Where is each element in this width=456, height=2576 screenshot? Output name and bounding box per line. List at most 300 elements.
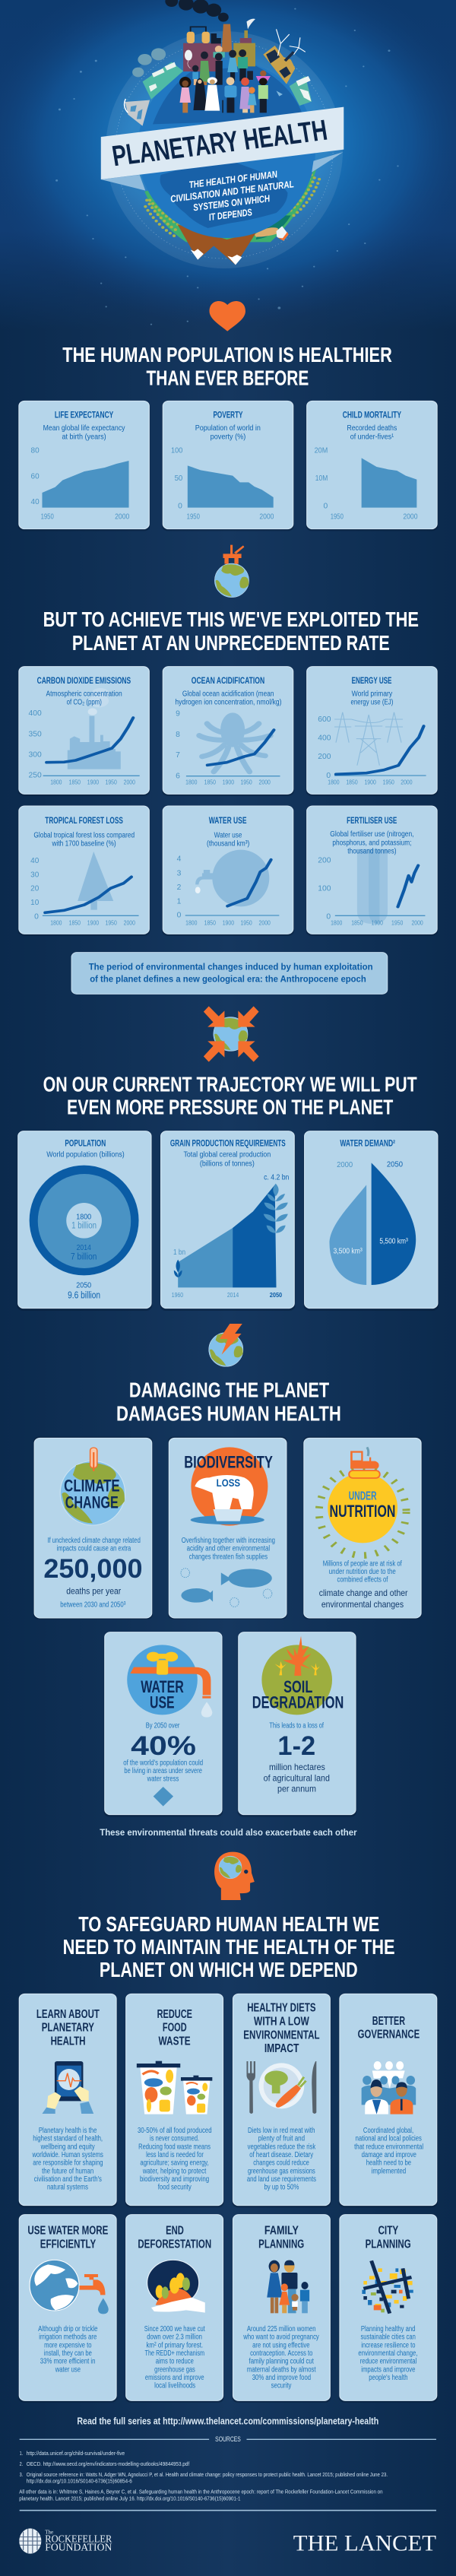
panel: healthy diets: by up to 50% [264,2183,299,2191]
panel: population: 1800 [76,1213,91,1221]
panel: soil degradation: This leads to a loss of [269,1721,324,1730]
planet [138,60,315,238]
panel: ocean acidification: 1800 [185,779,198,786]
panel: learn about planetary health: civilisation and the Earth's [34,2175,102,2184]
panel: population: 7 billion [71,1252,97,1261]
banner folds [101,152,344,191]
panel: water use [104,1632,223,1817]
panel: child mortality: of under-fives¹ [350,433,394,441]
panel: tropical forest loss: Global tropical forest loss compared [33,831,135,839]
panel: biodiversity loss: acidity and other environmental [187,1544,270,1553]
callout: Anthropocene [71,953,388,994]
panel: under nutrition: under nutrition due to the [329,1568,396,1576]
panel: better governance: that reduce environmental [354,2143,423,2151]
logo: The Lancet: THE LANCET [293,2530,436,2555]
panel: grain production: Total global cereal production [183,1150,271,1159]
panel: family planning: contraception. Access to [250,2349,312,2358]
icon: arrows pressing on earth [204,1006,259,1062]
panel: ocean acidification: 9 [176,709,180,718]
purple factory [183,27,221,71]
panel: child mortality: 20M [315,446,328,455]
panel: fertiliser use: 200 [318,856,331,864]
logo: Rockefeller Foundation: FOUNDATION [45,2542,112,2553]
panel: ocean acidification: 1900 [223,779,234,786]
panel: life expectancy [18,401,150,531]
tilted tan building and windmills [263,29,306,84]
panel: fertiliser use: 1900 [372,919,383,927]
panel: energy use: 0 [326,772,331,780]
panel: fertiliser use: 1850 [351,919,363,927]
sources heading: SOURCES [215,2436,241,2444]
subtitle: THE HEALTH OF HUMAN [188,169,279,190]
panel: tropical forest loss: 1850 [69,919,81,927]
logo: Rockefeller Foundation: The [45,2529,53,2536]
panel: learn about planetary health: are responsible for shaping [33,2159,103,2167]
panel: climate change: between 2030 and 2050³ [60,1600,126,1609]
panel: reduce food waste: FOOD [163,2022,187,2034]
panel: ocean acidification: 7 [176,751,180,760]
panel: family planning: Around 225 million women [247,2325,316,2333]
panel: end deforestation: The REDD+ mechanism [145,2349,204,2358]
panel: water use chart: 1950 [240,919,252,927]
hero illustration: planet with people and industry [106,0,343,268]
panel: city planning: environmental change, [358,2349,417,2358]
panel: use water efficiently: more expensive to [44,2341,92,2349]
panel: water demand: 2000 [337,1161,353,1169]
panel: energy use: 2000 [401,779,413,786]
panel: carbon dioxide: 1850 [69,779,81,786]
panel: family planning: security [271,2381,292,2390]
icon: earth with lightning [209,1324,243,1366]
panel: end deforestation: local livelihoods [154,2381,195,2390]
panel: tropical forest loss: TROPICAL FOREST LOSS [45,815,123,826]
panel: city planning: Planning healthy and [361,2325,415,2333]
panel: water use chart: 1850 [204,919,216,927]
panel: fertiliser use: 100 [318,884,331,893]
panel: water use chart: 1800 [185,919,198,927]
panel: energy use: 200 [318,753,331,761]
panel: learn about planetary health: PLANETARY [42,2022,94,2034]
panel: energy use: 600 [318,715,331,724]
panel: under nutrition: Millions of people are at risk of [323,1559,402,1568]
panel: water use chart [162,806,294,936]
panel: water use chart: WATER USE [209,815,247,826]
panel: carbon dioxide: Atmospheric concentration [46,690,122,698]
banner with title [101,107,344,191]
panel: better governance: damage and improve [362,2151,416,2159]
panel: water use: of the world's population could [123,1759,203,1767]
panel: use water efficiently: EFFICIENTLY [40,2238,96,2251]
small house [277,226,289,241]
banner ribbon [101,107,344,179]
panel: population [17,1131,152,1311]
panel: learn about planetary health: worldwide. Human systems [32,2151,103,2159]
panel: tropical forest loss: 0 [34,912,39,921]
panel: climate change: 250,000 [43,1553,143,1584]
panel: soil degradation [238,1632,356,1817]
panel: carbon dioxide: 2000 [124,779,135,786]
panel: ocean acidification: 1850 [204,779,216,786]
panel: water demand: 2050 [387,1160,403,1169]
panel: tropical forest loss: 10 [30,899,39,907]
panel: city planning: increase resilience to [361,2341,415,2349]
land ring [144,162,316,242]
panel: ocean acidification: 1950 [240,779,252,786]
panel: better governance: BETTER [372,2015,405,2028]
panel: climate change: CHANGE [65,1494,119,1512]
panel: learn about planetary health: Planetary health is the [39,2127,97,2135]
logo: Rockefeller Foundation [19,2528,112,2554]
icon: head with earth [214,1852,255,1900]
chimney [222,24,232,52]
panel: tropical forest loss: 1950 [106,919,117,927]
sources list [19,2450,388,2501]
panel: energy use: 400 [318,734,331,742]
panel: under nutrition [303,1436,422,1620]
panel: carbon dioxide: 1950 [106,779,117,786]
section: exploited planet [18,632,438,936]
heading [116,1379,341,1426]
sources list: 1. [20,2450,23,2457]
panel: tropical forest loss: 1900 [87,919,99,927]
panel: biodiversity loss: changes threaten fish supplies [189,1553,268,1561]
panel: child mortality [306,401,438,531]
heading [63,1913,395,1982]
panel: water use: be living in areas under severe [124,1767,202,1775]
panel: healthy diets [232,1994,331,2207]
panel: tropical forest loss: 40 [30,857,39,865]
panel: water use chart: 1900 [223,919,234,927]
panel: soil degradation: 1-2 [277,1731,315,1761]
panel: learn about planetary health [18,1994,117,2207]
panel: end deforestation: aims to reduce [156,2357,194,2365]
panel: soil degradation: per annum [277,1784,316,1794]
panel: water use chart: 0 [177,911,181,919]
panel: water use: WATER [141,1678,184,1697]
panel: grain production: c. 4.2 bn [264,1173,289,1182]
panel: population: 9.6 billion [68,1290,100,1300]
panel: population: 1 billion [71,1220,97,1230]
panel: ocean acidification: Global ocean acidification (mean [182,690,274,698]
panel: population: World population (billions) [46,1150,125,1159]
panel: child mortality: 1950 [331,512,344,521]
panel: carbon dioxide: 1800 [50,779,62,786]
panel: reduce food waste: biodiversity and improving [140,2175,209,2184]
panel: grain production: 2014 [227,1292,239,1299]
panel: end deforestation: Since 2000 we have cut [144,2325,205,2333]
panel: family planning: 30% and improve food [252,2374,311,2382]
icon: heart [210,301,245,332]
panel: poverty: 50 [175,474,182,483]
panel: healthy diets: vegetables reduce the risk [248,2143,315,2151]
panel: energy use [306,667,438,796]
panel: learn about planetary health: HEALTH [51,2035,85,2048]
balloon [185,50,192,68]
panel: family planning: maternal deaths by almost [247,2365,316,2374]
panel: use water efficiently: Although drip or trickle [38,2325,98,2333]
panel: use water efficiently [18,2215,117,2403]
callout: Anthropocene: The period of environmental changes induced by human exploitation [89,962,373,972]
panel: child mortality: Recorded deaths [347,424,397,433]
panel: poverty: poverty (%) [211,433,246,441]
panel: water use chart: 2 [177,884,181,892]
panel: tropical forest loss: 20 [30,884,39,893]
panel: carbon dioxide [18,667,150,796]
panel: energy use: World primary [352,690,393,698]
panel: child mortality: 0 [324,502,328,510]
heading: THAN EVER BEFORE [146,367,309,390]
panel: carbon dioxide: 400 [29,709,42,718]
panel: tropical forest loss [18,806,150,936]
panel: reduce food waste: water, helping to protect [142,2167,206,2175]
panel: reduce food waste: agriculture; saving energy, [140,2159,209,2167]
heading [43,1074,417,1119]
heading [62,344,392,390]
icon: oil rig on earth [214,545,249,598]
panel: biodiversity loss [168,1436,287,1620]
panel: better governance: health need to be [366,2159,411,2167]
panel: water use chart: 2000 [259,919,271,927]
panel: family planning [232,2215,331,2403]
panel: population: POPULATION [65,1138,106,1148]
panel: fertiliser use: thousand tonnes) [347,847,397,855]
panel: under nutrition: combined effects of [337,1575,388,1584]
panel: better governance [339,1994,438,2207]
panel: ocean acidification: OCEAN ACIDIFICATION [192,675,264,686]
panel: poverty [162,401,294,531]
panel: energy use: 1800 [328,779,340,786]
panel: water use: USE [150,1694,175,1712]
sources list: http://data.unicef.org/child-survival/under-five [27,2450,125,2457]
text: threats exacerbate: These environmental threats could also exacerbate each other [100,1827,357,1838]
sources list: OECD. http://www.oecd.org/env/indicators-modelling-outlooks/49844953.pdf [27,2460,190,2467]
sources list: 2. [20,2460,23,2467]
panel: ocean acidification [162,667,294,796]
teal and tan land [255,215,291,240]
panel: water use chart: 4 [177,855,181,863]
panel: life expectancy: Mean global life expectancy [43,424,125,433]
panel: reduce food waste: is never consumed. [150,2134,199,2143]
panel: poverty: POVERTY [213,409,243,420]
section: actions second row [18,2215,438,2555]
panel: end deforestation [125,2215,224,2403]
panel: carbon dioxide: 300 [29,750,42,759]
panel: water demand: WATER DEMAND² [340,1138,395,1148]
sources list: 3. [20,2471,23,2478]
panel: energy use: 1950 [383,779,394,786]
subtitle: IT DEPENDS [208,207,253,223]
panel: grain production [160,1131,295,1311]
panel: end deforestation: DEFORESTATION [138,2238,211,2251]
panel: use water efficiently: water use [55,2365,81,2374]
heading: DAMAGES HUMAN HEALTH [116,1402,341,1426]
panel: water demand: 5,500 km³ [379,1237,408,1245]
panel: city planning: people's health [369,2374,407,2382]
mountains [177,224,257,265]
panel: life expectancy: 60 [31,472,40,481]
panel: healthy diets: HEALTHY DIETS [247,2002,316,2014]
panel: tropical forest loss: 30 [30,871,39,879]
panel: life expectancy: at birth (years) [62,433,106,441]
panel: carbon dioxide: 250 [29,771,42,779]
panel: water use chart: 3 [177,869,181,877]
panel: poverty: 2000 [259,512,274,521]
panel: life expectancy: 40 [31,498,40,506]
panel: biodiversity loss: LOSS [217,1477,240,1489]
panel: biodiversity loss: Overfishing together with increasing [182,1537,275,1545]
panel: under nutrition: climate change and other [319,1588,408,1598]
panel: city planning: CITY [378,2224,398,2237]
panel: climate change: deaths per year [66,1586,122,1596]
panel: city planning: PLANNING [366,2238,411,2251]
logo: Rockefeller Foundation: ROCKEFELLER [45,2533,112,2545]
panel: learn about planetary health: the future of human [42,2167,93,2175]
panel: biodiversity loss: BIODIVERSITY [184,1454,273,1472]
panel: soil degradation: DEGRADATION [252,1694,344,1712]
panel: family planning: are not using effective [252,2341,310,2349]
panel: water demand: 3,500 km³ [334,1247,363,1255]
left factories [125,62,183,126]
panel: grain production: 2050 [270,1292,282,1299]
panel: use water efficiently: USE WATER MORE [27,2224,108,2237]
panel: family planning: who want to avoid pregnancy [243,2333,319,2341]
section: threats second row [100,1632,357,1900]
panel: reduce food waste: REDUCE [157,2008,192,2021]
panel: carbon dioxide: CARBON DIOXIDE EMISSIONS [37,675,131,686]
panel: carbon dioxide: 350 [29,730,42,738]
callout: Anthropocene: of the planet defines a new geological era: the Anthropocene epoch [90,974,366,984]
panel: water use: 40% [131,1731,196,1761]
panel: better governance: Coordinated global, [363,2127,413,2135]
panel: reduce food waste: 30-50% of all food produced [138,2127,212,2135]
section: damage to health [33,1324,422,1620]
panel: end deforestation: km² of primary forest. [146,2341,203,2349]
title: PLANETARY HEALTH [109,113,330,173]
panel: end deforestation: emissions and improve [145,2374,204,2382]
panel: poverty: 100 [171,446,182,455]
panel: ocean acidification: 2000 [259,779,271,786]
panel: child mortality: 2000 [403,512,418,521]
panel: fertiliser use: FERTILISER USE [347,815,397,826]
sources list: http://dx.doi.org/10.1016/S0140-6736(15)60854-6 [27,2478,132,2485]
panel: reduce food waste: WASTE [159,2035,191,2048]
panel: reduce food waste: less land is needed for [146,2151,204,2159]
panel: child mortality: 10M [315,474,328,483]
panel: poverty: Population of world in [195,424,261,433]
panel: carbon dioxide: of CO₂ (ppm) [67,698,102,706]
panel: water demand [303,1131,439,1311]
panel: tropical forest loss: 1800 [50,919,62,927]
heading: DAMAGING THE PLANET [129,1379,329,1402]
panel: family planning: PLANNING [258,2238,304,2251]
teal building right [290,76,312,106]
panel: climate change [33,1436,153,1620]
panel: energy use: 1900 [364,779,376,786]
panel: fertiliser use: 1950 [391,919,404,927]
panel: water use chart: 1 [177,897,181,906]
section: pressure on the planet [17,953,439,1311]
panel: healthy diets: WITH A LOW [254,2016,309,2028]
panel: energy use: energy use (EJ) [350,698,394,706]
panel: child mortality: CHILD MORTALITY [343,409,401,420]
panel: learn about planetary health: LEARN ABOUT [36,2008,100,2021]
panel: fertiliser use: 0 [326,912,331,921]
panel: soil degradation: of agricultural land [264,1772,330,1783]
panel: reduce food waste [125,1994,224,2207]
panel: healthy diets: plenty of fruit and [258,2134,305,2143]
panel: ocean acidification: hydrogen ion concentration, nmol/kg) [175,698,282,706]
subtitle: CIVILISATION AND THE NATURAL [169,179,295,205]
panel: population: 2050 [76,1281,91,1290]
panel: use water efficiently: irrigation methods are [39,2333,97,2341]
panel: end deforestation: down over 2.3 million [147,2333,202,2341]
panel: poverty: 0 [178,502,182,510]
panel: city planning: sustainable cities can [360,2333,416,2341]
panel: family planning: family planning could cut [249,2357,314,2365]
panel: healthy diets: IMPACT [264,2042,299,2055]
panel: end deforestation: greenhouse gas [154,2365,195,2374]
panel: learn about planetary health: highest standard of health, [33,2134,103,2143]
panel: fertiliser use: Global fertiliser use (nitrogen, [330,830,414,839]
panel: ocean acidification: 6 [176,772,180,780]
panel: water use chart: (thousand km³) [207,839,250,848]
panel: healthy diets: changes could reduce [253,2159,309,2167]
panel: population: 2014 [77,1244,91,1252]
panel: grain production: GRAIN PRODUCTION REQUIREMENTS [170,1138,286,1148]
panel: tropical forest loss: 2000 [124,919,135,927]
panel: life expectancy: LIFE EXPECTANCY [55,409,113,420]
globe halo ring [106,31,343,268]
panel: use water efficiently: 33% more efficient in [40,2357,96,2365]
panel: city planning: reduce environmental [360,2357,416,2365]
panel: better governance: GOVERNANCE [358,2028,420,2041]
panel: fertiliser use: phosphorus, and potassium; [332,839,411,847]
panel: better governance: national and local policies [356,2134,422,2143]
panel: reduce food waste: food security [158,2183,192,2191]
panel: grain production: (billions of tonnes) [200,1160,255,1168]
panel: poverty: 1950 [187,512,200,521]
panel: climate change: If unchecked climate change related [47,1537,141,1545]
panel: city planning: impacts and improve [361,2365,415,2374]
panel: energy use: 1850 [346,779,358,786]
panel: fertiliser use [306,806,438,936]
panel: use water efficiently: install, they can be [44,2349,92,2358]
people [179,46,271,113]
subtitle [169,169,295,223]
panel: under nutrition: environmental changes [321,1599,404,1610]
panel: water use chart: Water use [214,831,242,839]
panel: climate change: impacts could cause an extra [57,1544,131,1553]
panel: grain production: 1960 [172,1292,183,1299]
panel: ocean acidification: 8 [176,731,180,739]
smoke from chimney [165,0,229,22]
panel: healthy diets: greenhouse gas emissions [248,2167,315,2175]
panel: energy use: ENERGY USE [352,675,392,686]
panel: under nutrition: NUTRITION [330,1502,395,1521]
panel: healthy diets: and land use requirements [247,2175,316,2184]
panel: better governance: implemented [372,2167,406,2175]
panel: tropical forest loss: with 1700 baseline (%) [52,839,116,848]
panel: fertiliser use: 2000 [411,919,423,927]
panel: fertiliser use: 1800 [331,919,343,927]
section: healthier population [18,344,438,632]
olive building [233,19,255,66]
section: safeguard actions [18,1913,438,2207]
panel: end deforestation: END [166,2224,184,2237]
subtitle: SYSTEMS ON WHICH [192,193,271,213]
panel: healthy diets: of heart disease. Dietary [249,2151,313,2159]
panel: climate change: CLIMATE [64,1477,120,1496]
